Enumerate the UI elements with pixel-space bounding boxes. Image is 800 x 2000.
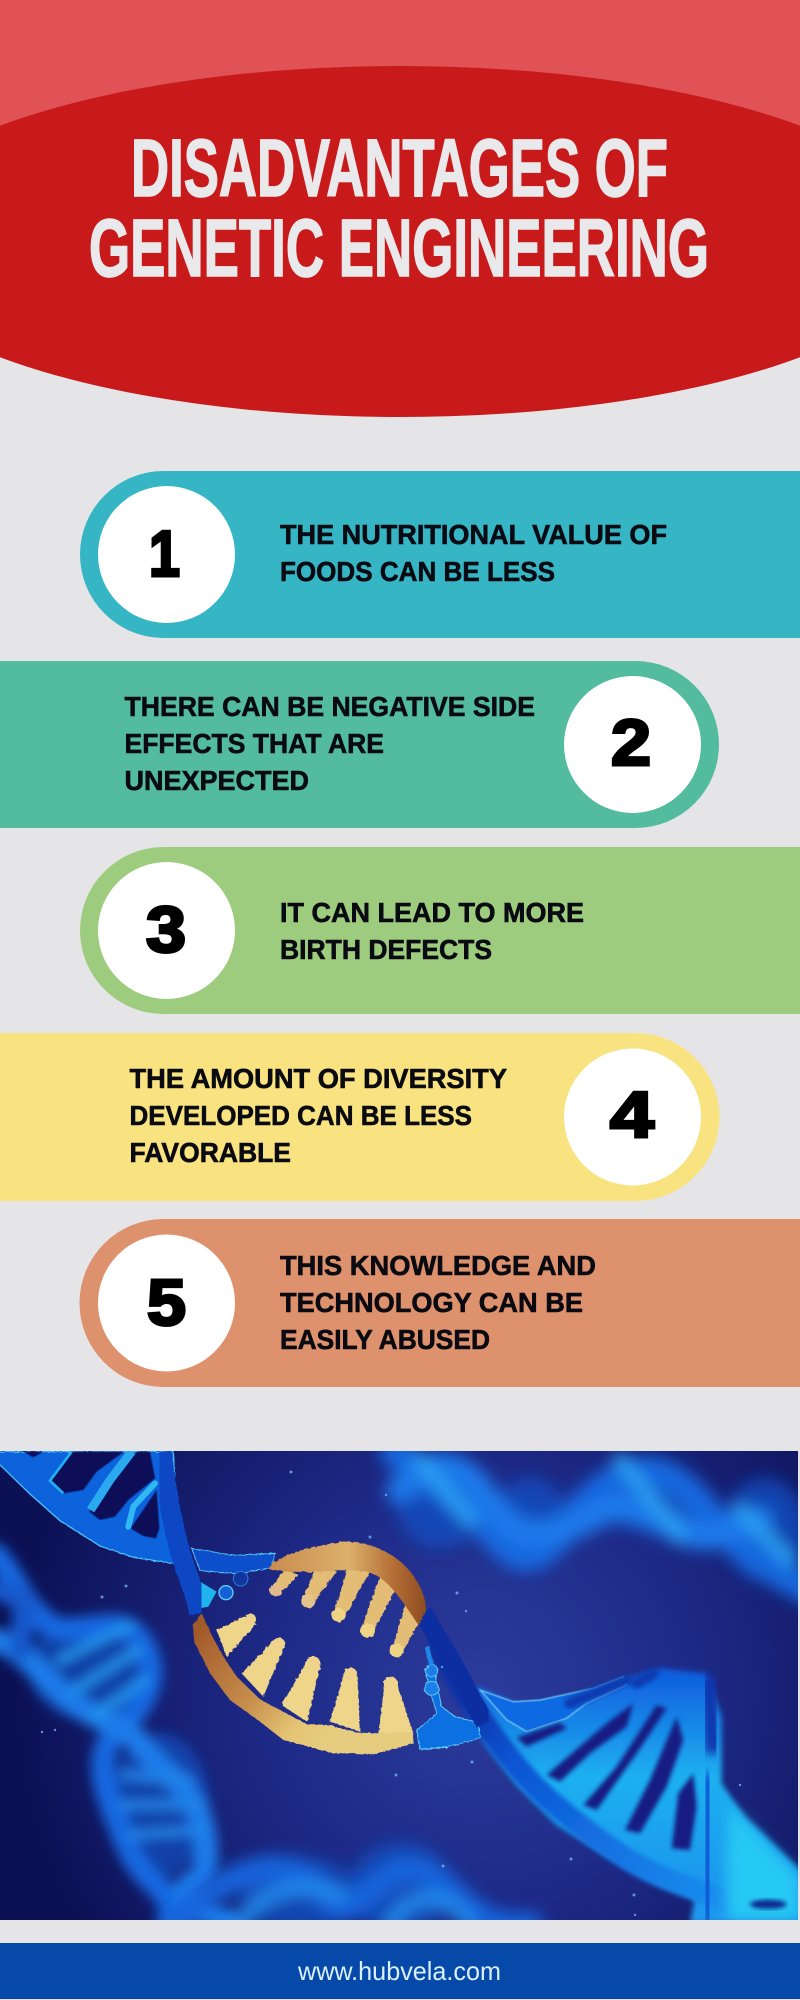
number badge 3 (98, 862, 235, 999)
top left sharp DNA helix (0, 1452, 275, 1613)
item 5 text: EASILY ABUSED (280, 1324, 490, 1355)
panel: item 3 (80, 847, 800, 1014)
item 1 text: FOODS CAN BE LESS (280, 556, 555, 587)
item 1 text: THE NUTRITIONAL VALUE OF (280, 519, 667, 550)
DNA illustration (0, 1451, 800, 1934)
number 2: 2 (611, 706, 651, 779)
blurred DNA strand: bottom (170, 1842, 530, 1934)
footer bar (0, 1943, 800, 1999)
item 2 text (124, 691, 535, 796)
number 1: 1 (149, 517, 180, 590)
blue bead section (417, 1612, 485, 1749)
panel: item 4 (0, 1033, 720, 1201)
panel: item 1 (80, 471, 800, 638)
item 3 text: BIRTH DEFECTS (280, 934, 492, 965)
website address: www.hubvela.com (297, 1956, 501, 1986)
lower orange arc (193, 1613, 414, 1754)
item 4 text: DEVELOPED CAN BE LESS (130, 1100, 472, 1131)
title (89, 123, 709, 294)
item 5 text: TECHNOLOGY CAN BE (280, 1287, 583, 1318)
item 4 text: THE AMOUNT OF DIVERSITY (130, 1063, 507, 1094)
item 3 text: IT CAN LEAD TO MORE (280, 897, 584, 928)
number badge 1 (98, 486, 235, 623)
header banner (0, 0, 800, 417)
lower right sharp DNA helix (440, 1647, 800, 1923)
number badge 2 (564, 676, 701, 813)
item 3 text (280, 897, 584, 965)
item 1 text (280, 519, 667, 587)
number 5: 5 (147, 1266, 186, 1339)
item 2 text: THERE CAN BE NEGATIVE SIDE (124, 691, 535, 722)
item 5 text: THIS KNOWLEDGE AND (280, 1250, 596, 1281)
upper orange arc (269, 1542, 426, 1657)
panel: item 5 (80, 1219, 800, 1387)
item 5 text (280, 1250, 596, 1355)
item 4 text: FAVORABLE (130, 1137, 291, 1168)
item 2 text: EFFECTS THAT ARE (124, 728, 384, 759)
gene edit: orange and yellow section of the helix (193, 1542, 485, 1754)
number badge 5 (98, 1234, 235, 1372)
blurred DNA strand: top right (395, 1452, 800, 1590)
floating particles (41, 1470, 741, 1916)
item 2 text: UNEXPECTED (124, 765, 309, 796)
number 4: 4 (610, 1078, 654, 1151)
panel: item 2 (0, 661, 719, 828)
blurred DNA strand: left (0, 1555, 235, 1925)
number badge 4 (564, 1048, 701, 1186)
item 4 text (130, 1063, 507, 1168)
number 3: 3 (146, 893, 186, 966)
